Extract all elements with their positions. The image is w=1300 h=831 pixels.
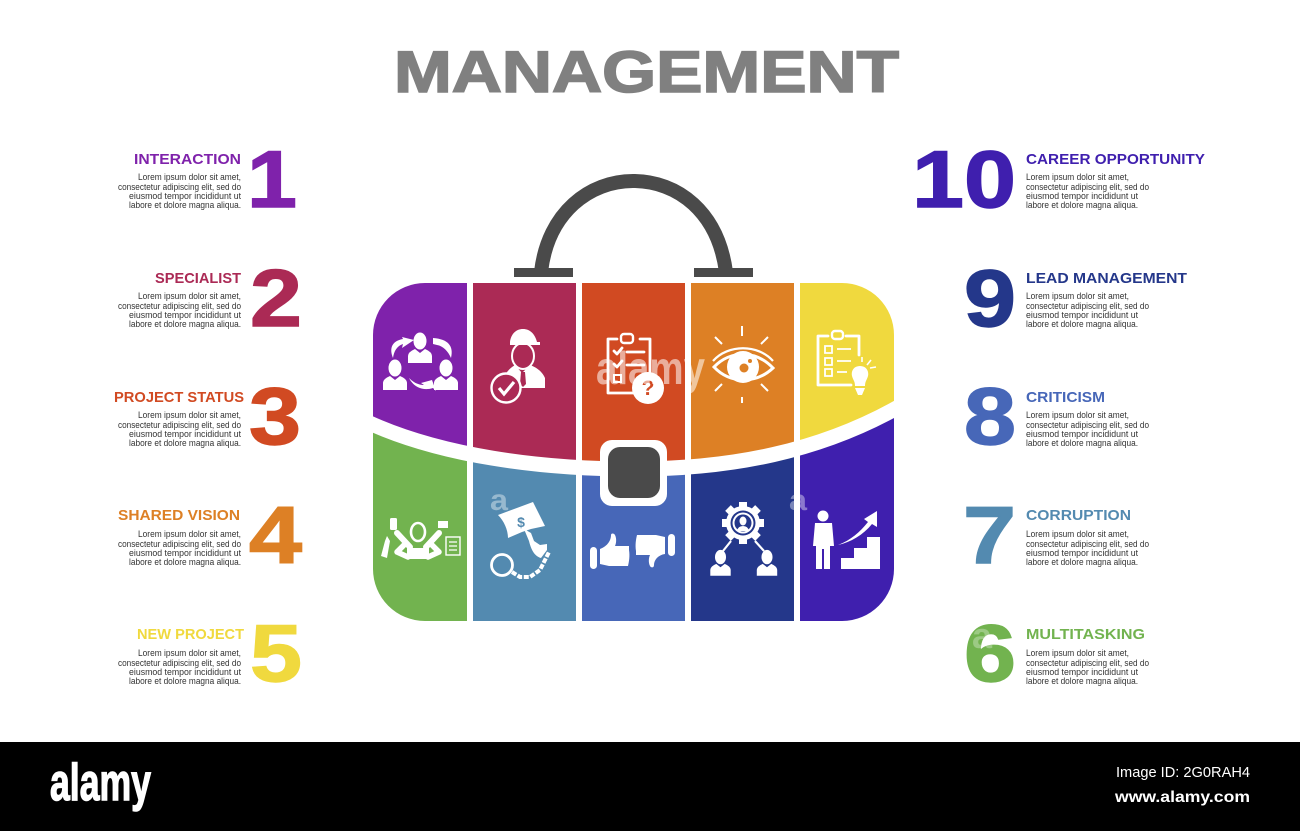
item 5: new project: consectetur adipiscing elit, sed do [118, 658, 241, 668]
item 4: shared vision: Lorem ipsum dolor sit amet, [138, 529, 241, 539]
item 1: interaction: consectetur adipiscing elit, sed do [118, 182, 241, 192]
item 3: project status: eiusmod tempor incididunt ut [129, 429, 242, 439]
item 1: interaction [118, 135, 297, 225]
item 5: new project: Lorem ipsum dolor sit amet, [138, 648, 241, 658]
item 3: project status: 3 [249, 372, 301, 462]
item 4: shared vision: labore et dolore magna aliqua. [129, 557, 241, 567]
icon: project status, clipboard with question mark [608, 334, 664, 404]
item 5: new project: 5 [250, 609, 302, 699]
item 9: lead management: Lorem ipsum dolor sit amet, [1026, 291, 1129, 301]
item 5: new project [118, 609, 302, 699]
item 7: corruption: CORRUPTION [1026, 507, 1131, 524]
item 6: multitasking: MULTITASKING [1026, 626, 1145, 643]
title: MANAGEMENT [394, 40, 899, 105]
item 10: career opportunity: Lorem ipsum dolor sit amet, [1026, 172, 1129, 182]
item 6: multitasking: labore et dolore magna aliqua. [1026, 676, 1138, 686]
item 8: criticism: labore et dolore magna aliqua. [1026, 438, 1138, 448]
item 4: shared vision [118, 491, 302, 581]
icon: new project, clipboard with light bulb [818, 331, 876, 395]
icon: shared vision, eye with rays [713, 326, 773, 403]
watermark: small letters [491, 494, 808, 510]
item 5: new project: NEW PROJECT [137, 626, 244, 643]
item 9: lead management: labore et dolore magna aliqua. [1026, 319, 1138, 329]
item 7: corruption: 7 [963, 491, 1016, 581]
icon: criticism, thumbs up and down [590, 534, 675, 569]
icon: multitasking, person with many arms [381, 518, 460, 559]
icon: lead management, gear with two people [710, 502, 777, 576]
icon: specialist, engineer with check badge [492, 329, 545, 402]
item 6: multitasking: consectetur adipiscing elit, sed do [1026, 658, 1149, 668]
icon: project status, clipboard with question mark: ? [642, 377, 654, 400]
item 6: multitasking [964, 609, 1149, 699]
item 6: multitasking: a [972, 615, 993, 656]
item 10: career opportunity: labore et dolore magna aliqua. [1026, 200, 1138, 210]
icon: corruption, hand with money and handcuffs: $ [517, 514, 525, 530]
icon: corruption, hand with money and handcuffs [492, 502, 549, 577]
item 4: shared vision: 4 [249, 491, 302, 581]
footer bar [0, 742, 1300, 831]
item 2: specialist: SPECIALIST [155, 270, 241, 287]
item 2: specialist: consectetur adipiscing elit, sed do [118, 301, 241, 311]
item 1: interaction: INTERACTION [134, 151, 241, 168]
icon: career opportunity, man with rising stairs [813, 510, 880, 569]
briefcase handle [514, 181, 753, 277]
item 2: specialist: eiusmod tempor incididunt ut [129, 310, 242, 320]
item 10: career opportunity: 10 [912, 135, 1016, 225]
item 7: corruption: Lorem ipsum dolor sit amet, [1026, 529, 1129, 539]
item 4: shared vision: consectetur adipiscing elit, sed do [118, 539, 241, 549]
watermark: small letters: a [490, 484, 508, 517]
item 6: multitasking: 6 [964, 609, 1016, 699]
item 1: interaction: 1 [247, 135, 297, 225]
item 1: interaction: labore et dolore magna aliqua. [129, 200, 241, 210]
watermark: small letters: a [638, 614, 656, 647]
footer image id: Image ID: 2G0RAH4 [1116, 764, 1250, 781]
item 8: criticism [964, 372, 1149, 462]
watermark: small letters: a [789, 484, 807, 517]
item 7: corruption: consectetur adipiscing elit, sed do [1026, 539, 1149, 549]
item 9: lead management: consectetur adipiscing elit, sed do [1026, 301, 1149, 311]
item 2: specialist: labore et dolore magna aliqua. [129, 319, 241, 329]
item 6: multitasking: Lorem ipsum dolor sit amet, [1026, 648, 1129, 658]
footer website: www.alamy.com [1114, 789, 1250, 806]
item 4: shared vision: eiusmod tempor incididunt ut [129, 548, 242, 558]
item 10: career opportunity: CAREER OPPORTUNITY [1026, 151, 1205, 168]
watermark: central alamy: alamy [596, 342, 705, 394]
briefcase clasp [600, 440, 667, 506]
item 8: criticism: CRITICISM [1026, 389, 1105, 406]
item 5: new project: labore et dolore magna aliqua. [129, 676, 241, 686]
item 3: project status: Lorem ipsum dolor sit amet, [138, 410, 241, 420]
item 9: lead management: 9 [964, 254, 1016, 344]
item 10: career opportunity [912, 135, 1205, 225]
item 7: corruption [963, 491, 1149, 581]
item 8: criticism: 8 [964, 372, 1016, 462]
item 6: multitasking: eiusmod tempor incididunt ut [1026, 667, 1139, 677]
item 3: project status: labore et dolore magna aliqua. [129, 438, 241, 448]
item 7: corruption: labore et dolore magna aliqua. [1026, 557, 1138, 567]
item 9: lead management: eiusmod tempor incididunt ut [1026, 310, 1139, 320]
icon: interaction, three people with arrows [383, 332, 458, 391]
item 5: new project: eiusmod tempor incididunt ut [129, 667, 242, 677]
item 3: project status: PROJECT STATUS [114, 389, 244, 406]
item 8: criticism: eiusmod tempor incididunt ut [1026, 429, 1139, 439]
item 8: criticism: consectetur adipiscing elit, sed do [1026, 420, 1149, 430]
item 3: project status [114, 372, 301, 462]
item 3: project status: consectetur adipiscing elit, sed do [118, 420, 241, 430]
item 7: corruption: eiusmod tempor incididunt ut [1026, 548, 1139, 558]
item 2: specialist [118, 254, 302, 344]
briefcase body [365, 283, 902, 621]
item 1: interaction: eiusmod tempor incididunt ut [129, 191, 242, 201]
footer logo: alamy [50, 754, 151, 812]
item 10: career opportunity: eiusmod tempor incididunt ut [1026, 191, 1139, 201]
item 2: specialist: Lorem ipsum dolor sit amet, [138, 291, 241, 301]
item 8: criticism: Lorem ipsum dolor sit amet, [1026, 410, 1129, 420]
item 9: lead management: LEAD MANAGEMENT [1026, 270, 1187, 287]
item 1: interaction: Lorem ipsum dolor sit amet, [138, 172, 241, 182]
item 10: career opportunity: consectetur adipiscing elit, sed do [1026, 182, 1149, 192]
item 9: lead management [964, 254, 1187, 344]
item 4: shared vision: SHARED VISION [118, 507, 240, 524]
item 2: specialist: 2 [250, 254, 302, 344]
